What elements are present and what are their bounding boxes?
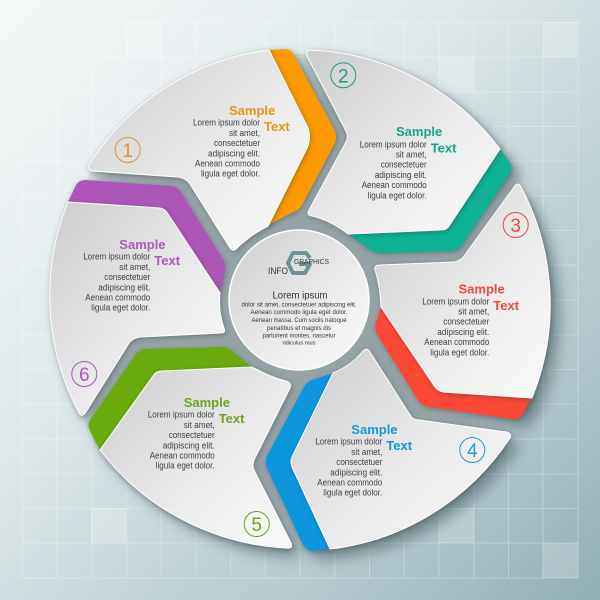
- white card 5: [100, 367, 292, 548]
- white card 6: [50, 202, 225, 415]
- heading 1: Sample: [229, 103, 275, 118]
- body 2: sit amet,: [396, 150, 427, 160]
- body 4: adipiscing elit.: [330, 467, 382, 477]
- soft shadow beneath the wheel: [59, 58, 559, 560]
- centre disc: [229, 230, 369, 370]
- heading 2: [396, 124, 457, 155]
- heading 3: Text: [493, 298, 520, 313]
- panel 6: purple: [50, 180, 225, 415]
- heading 6: Sample: [119, 237, 166, 252]
- number 1: [115, 138, 140, 162]
- body 6: consectetuer: [104, 272, 150, 282]
- white card 2: [306, 50, 500, 234]
- body 2: consectetuer: [381, 160, 427, 170]
- centre body: [242, 302, 357, 346]
- white card 1: [88, 50, 310, 250]
- body 3: consectetuer: [443, 317, 489, 327]
- body 2: ligula eget dolor.: [368, 190, 427, 200]
- centre body: Aenean massa. Cum sociis natoque: [252, 317, 347, 324]
- heading 5: Sample: [184, 395, 230, 410]
- heading 5: Text: [219, 411, 245, 426]
- number 4: 4: [467, 441, 478, 462]
- body 1: adipiscing elit.: [208, 148, 260, 158]
- heading 2: Text: [431, 140, 457, 155]
- body 3: sit amet,: [458, 306, 489, 316]
- heading 2: Sample: [396, 124, 442, 139]
- centre body: parturient montes, nascetur: [262, 332, 336, 340]
- icon: hexagon G logo: [288, 253, 310, 273]
- number 4: [460, 438, 485, 462]
- panel 3: red: [375, 184, 550, 419]
- number 5: 5: [251, 515, 262, 536]
- body 4: Lorem ipsum dolor: [315, 437, 382, 447]
- body 4: [315, 437, 382, 498]
- body 1: consectetuer: [214, 138, 260, 148]
- heading 6: Text: [154, 253, 181, 268]
- blue strip: [266, 373, 333, 551]
- heading 6: [119, 237, 181, 268]
- heading 5: [184, 395, 245, 426]
- panel 4: blue: [266, 349, 510, 551]
- heading 3: Sample: [458, 282, 505, 296]
- body 5: Lorem ipsum dolor: [148, 410, 215, 420]
- white card 3: [375, 184, 550, 398]
- number 6: [72, 362, 97, 386]
- body 4: consectetuer: [336, 457, 382, 467]
- body 5: sit amet,: [184, 420, 215, 430]
- body 5: adipiscing elit.: [163, 440, 215, 450]
- body 3: adipiscing elit.: [437, 327, 489, 337]
- white card 4: [291, 349, 510, 549]
- heading 3: [458, 282, 520, 313]
- heading 1: [229, 103, 290, 134]
- heading 4: Text: [386, 438, 413, 453]
- body 1: [193, 118, 260, 179]
- body 2: Aenean commodo: [362, 180, 427, 190]
- body 3: Lorem ipsum dolor: [422, 296, 489, 306]
- centre body: penatibus et magnis dis: [267, 325, 331, 332]
- body 4: sit amet,: [351, 447, 382, 457]
- red strip: [375, 307, 532, 419]
- logo words: [268, 257, 329, 277]
- body 6: ligula eget dolor.: [91, 303, 150, 313]
- body 6: sit amet,: [119, 262, 150, 272]
- centre body: ridiculus mus: [282, 340, 316, 346]
- body 1: Aenean commodo: [195, 158, 260, 168]
- panel 1: orange: [88, 49, 336, 250]
- number 2: [331, 63, 356, 88]
- panel 5: green: [88, 347, 292, 548]
- gray backing visible in the gaps: [54, 54, 550, 550]
- body 4: Aenean commodo: [317, 478, 382, 488]
- logo words: INFO: [268, 266, 288, 277]
- heading 4: [351, 422, 413, 453]
- panel 2: teal: [306, 50, 512, 253]
- heading 1: Text: [264, 119, 290, 134]
- centre body: dolor sit amet, consectetuer adipiscing elit.: [242, 302, 357, 308]
- body 6: [83, 252, 150, 313]
- body 5: [148, 410, 215, 471]
- number 3: [503, 212, 528, 238]
- body 3: Aenean commodo: [424, 337, 489, 347]
- centre body: Aenean commodo ligula eget dolor.: [250, 309, 348, 316]
- body 3: ligula eget dolor.: [430, 347, 489, 357]
- body 3: [422, 296, 489, 357]
- centre heading: Lorem ipsum: [272, 290, 328, 302]
- body 2: [360, 139, 427, 200]
- number 6: 6: [79, 365, 90, 386]
- heading 4: Sample: [351, 422, 398, 437]
- number 3: 3: [510, 216, 521, 237]
- body 1: Lorem ipsum dolor: [193, 118, 260, 128]
- logo words: GRAPHICS: [294, 257, 329, 266]
- number 1: 1: [122, 141, 133, 162]
- body 5: ligula eget dolor.: [156, 461, 215, 471]
- body 1: sit amet,: [229, 128, 260, 138]
- body 2: Lorem ipsum dolor: [360, 139, 427, 149]
- purple strip: [68, 180, 225, 293]
- number 2: 2: [338, 66, 349, 87]
- orange strip: [266, 49, 336, 227]
- body 2: adipiscing elit.: [375, 170, 427, 180]
- body 4: ligula eget dolor.: [323, 488, 382, 498]
- number 5: [244, 512, 269, 536]
- body 6: Aenean commodo: [85, 292, 150, 302]
- green strip: [88, 347, 252, 450]
- body 1: ligula eget dolor.: [201, 169, 260, 179]
- body 5: Aenean commodo: [150, 450, 215, 460]
- body 5: consectetuer: [169, 430, 215, 440]
- teal strip: [348, 149, 512, 253]
- body 6: Lorem ipsum dolor: [83, 252, 150, 262]
- body 6: adipiscing elit.: [98, 282, 150, 292]
